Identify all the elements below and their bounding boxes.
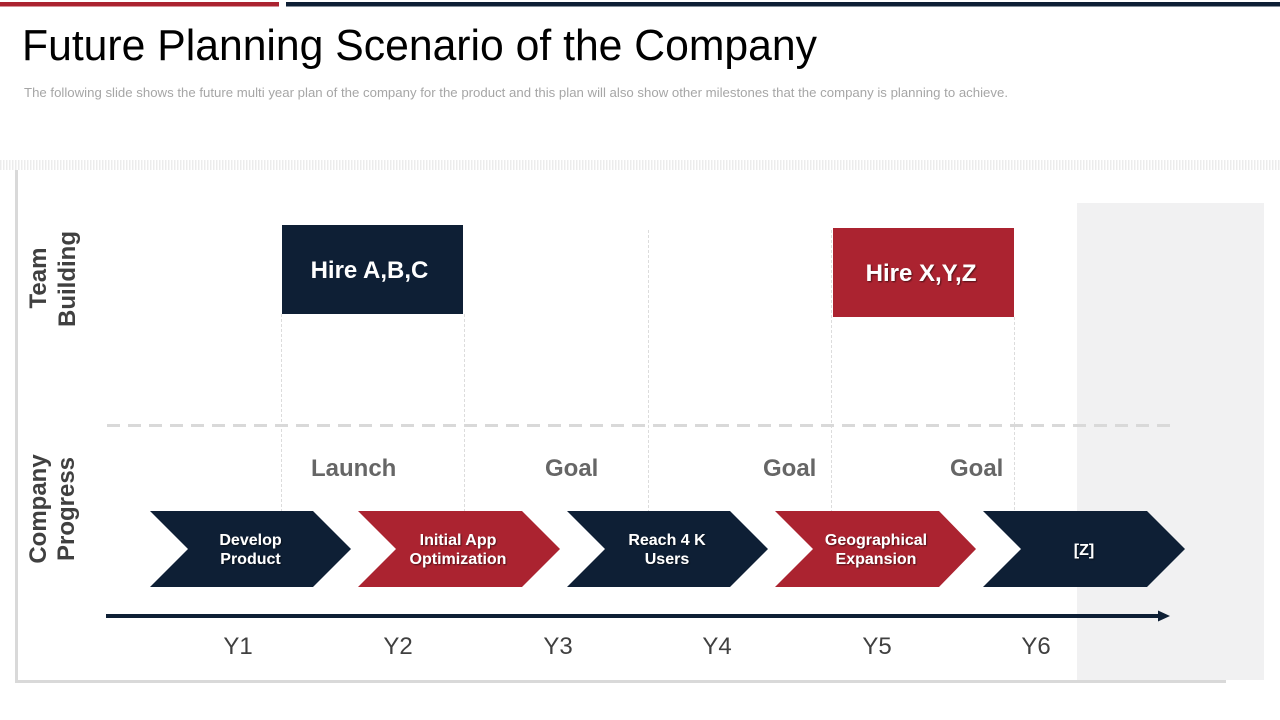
highlighted future column	[1077, 203, 1264, 680]
chevron: reach 4 k users: Users	[645, 551, 689, 568]
row label: team building: Building	[54, 231, 81, 327]
team box: hire A,B,C	[282, 225, 463, 314]
chevron: reach 4 k users: Reach 4 K	[628, 532, 706, 549]
timeline arrow	[106, 610, 1170, 622]
row label: team building: Team	[25, 248, 52, 308]
row label: team building	[25, 231, 81, 327]
year labels: Y4	[702, 633, 732, 660]
chevron: initial app optimization: Initial App	[420, 532, 497, 549]
team box: hire A,B,C: Hire A,B,C	[311, 257, 428, 284]
year labels: Y3	[543, 633, 573, 660]
year labels: Y2	[383, 633, 413, 660]
chevron: placeholder Z	[983, 511, 1185, 587]
chevron: develop product	[150, 511, 351, 587]
chevron: geographical expansion: Expansion	[836, 551, 916, 568]
milestone labels: Goal	[763, 455, 816, 482]
chevron: develop product: Product	[220, 551, 281, 568]
chevron: geographical expansion: Geographical	[825, 532, 927, 549]
chevron: geographical expansion	[775, 511, 976, 587]
year labels: Y6	[1021, 633, 1051, 660]
chevron: placeholder Z: [Z]	[1074, 542, 1094, 559]
milestone labels: Launch	[311, 455, 396, 482]
milestone labels: Goal	[950, 455, 1003, 482]
chart frame axes	[16, 170, 1226, 682]
vertical milestone guides	[282, 230, 1014, 511]
subtitle text: The following slide shows the future multi year plan of the company for the product and this plan will also show other milestones that the company is planning to achieve.	[24, 86, 1008, 100]
year labels: Y5	[862, 633, 892, 660]
milestone labels: Goal	[545, 455, 598, 482]
chevron: initial app optimization: Optimization	[410, 551, 506, 568]
chevron: initial app optimization	[358, 511, 560, 587]
milestone labels	[311, 455, 1003, 482]
team box: hire X,Y,Z: Hire X,Y,Z	[866, 260, 976, 287]
title: Future Planning Scenario of the Company	[22, 21, 817, 70]
year labels	[223, 633, 1051, 660]
chevron: develop product: Develop	[219, 532, 282, 549]
chevron: reach 4 k users	[567, 511, 768, 587]
row label: company progress: Company	[25, 454, 52, 564]
row label: company progress: Progress	[53, 457, 80, 561]
year labels: Y1	[223, 633, 253, 660]
top accent bars	[0, 2, 1280, 6]
team box: hire X,Y,Z	[833, 228, 1014, 317]
row label: company progress	[25, 454, 80, 564]
